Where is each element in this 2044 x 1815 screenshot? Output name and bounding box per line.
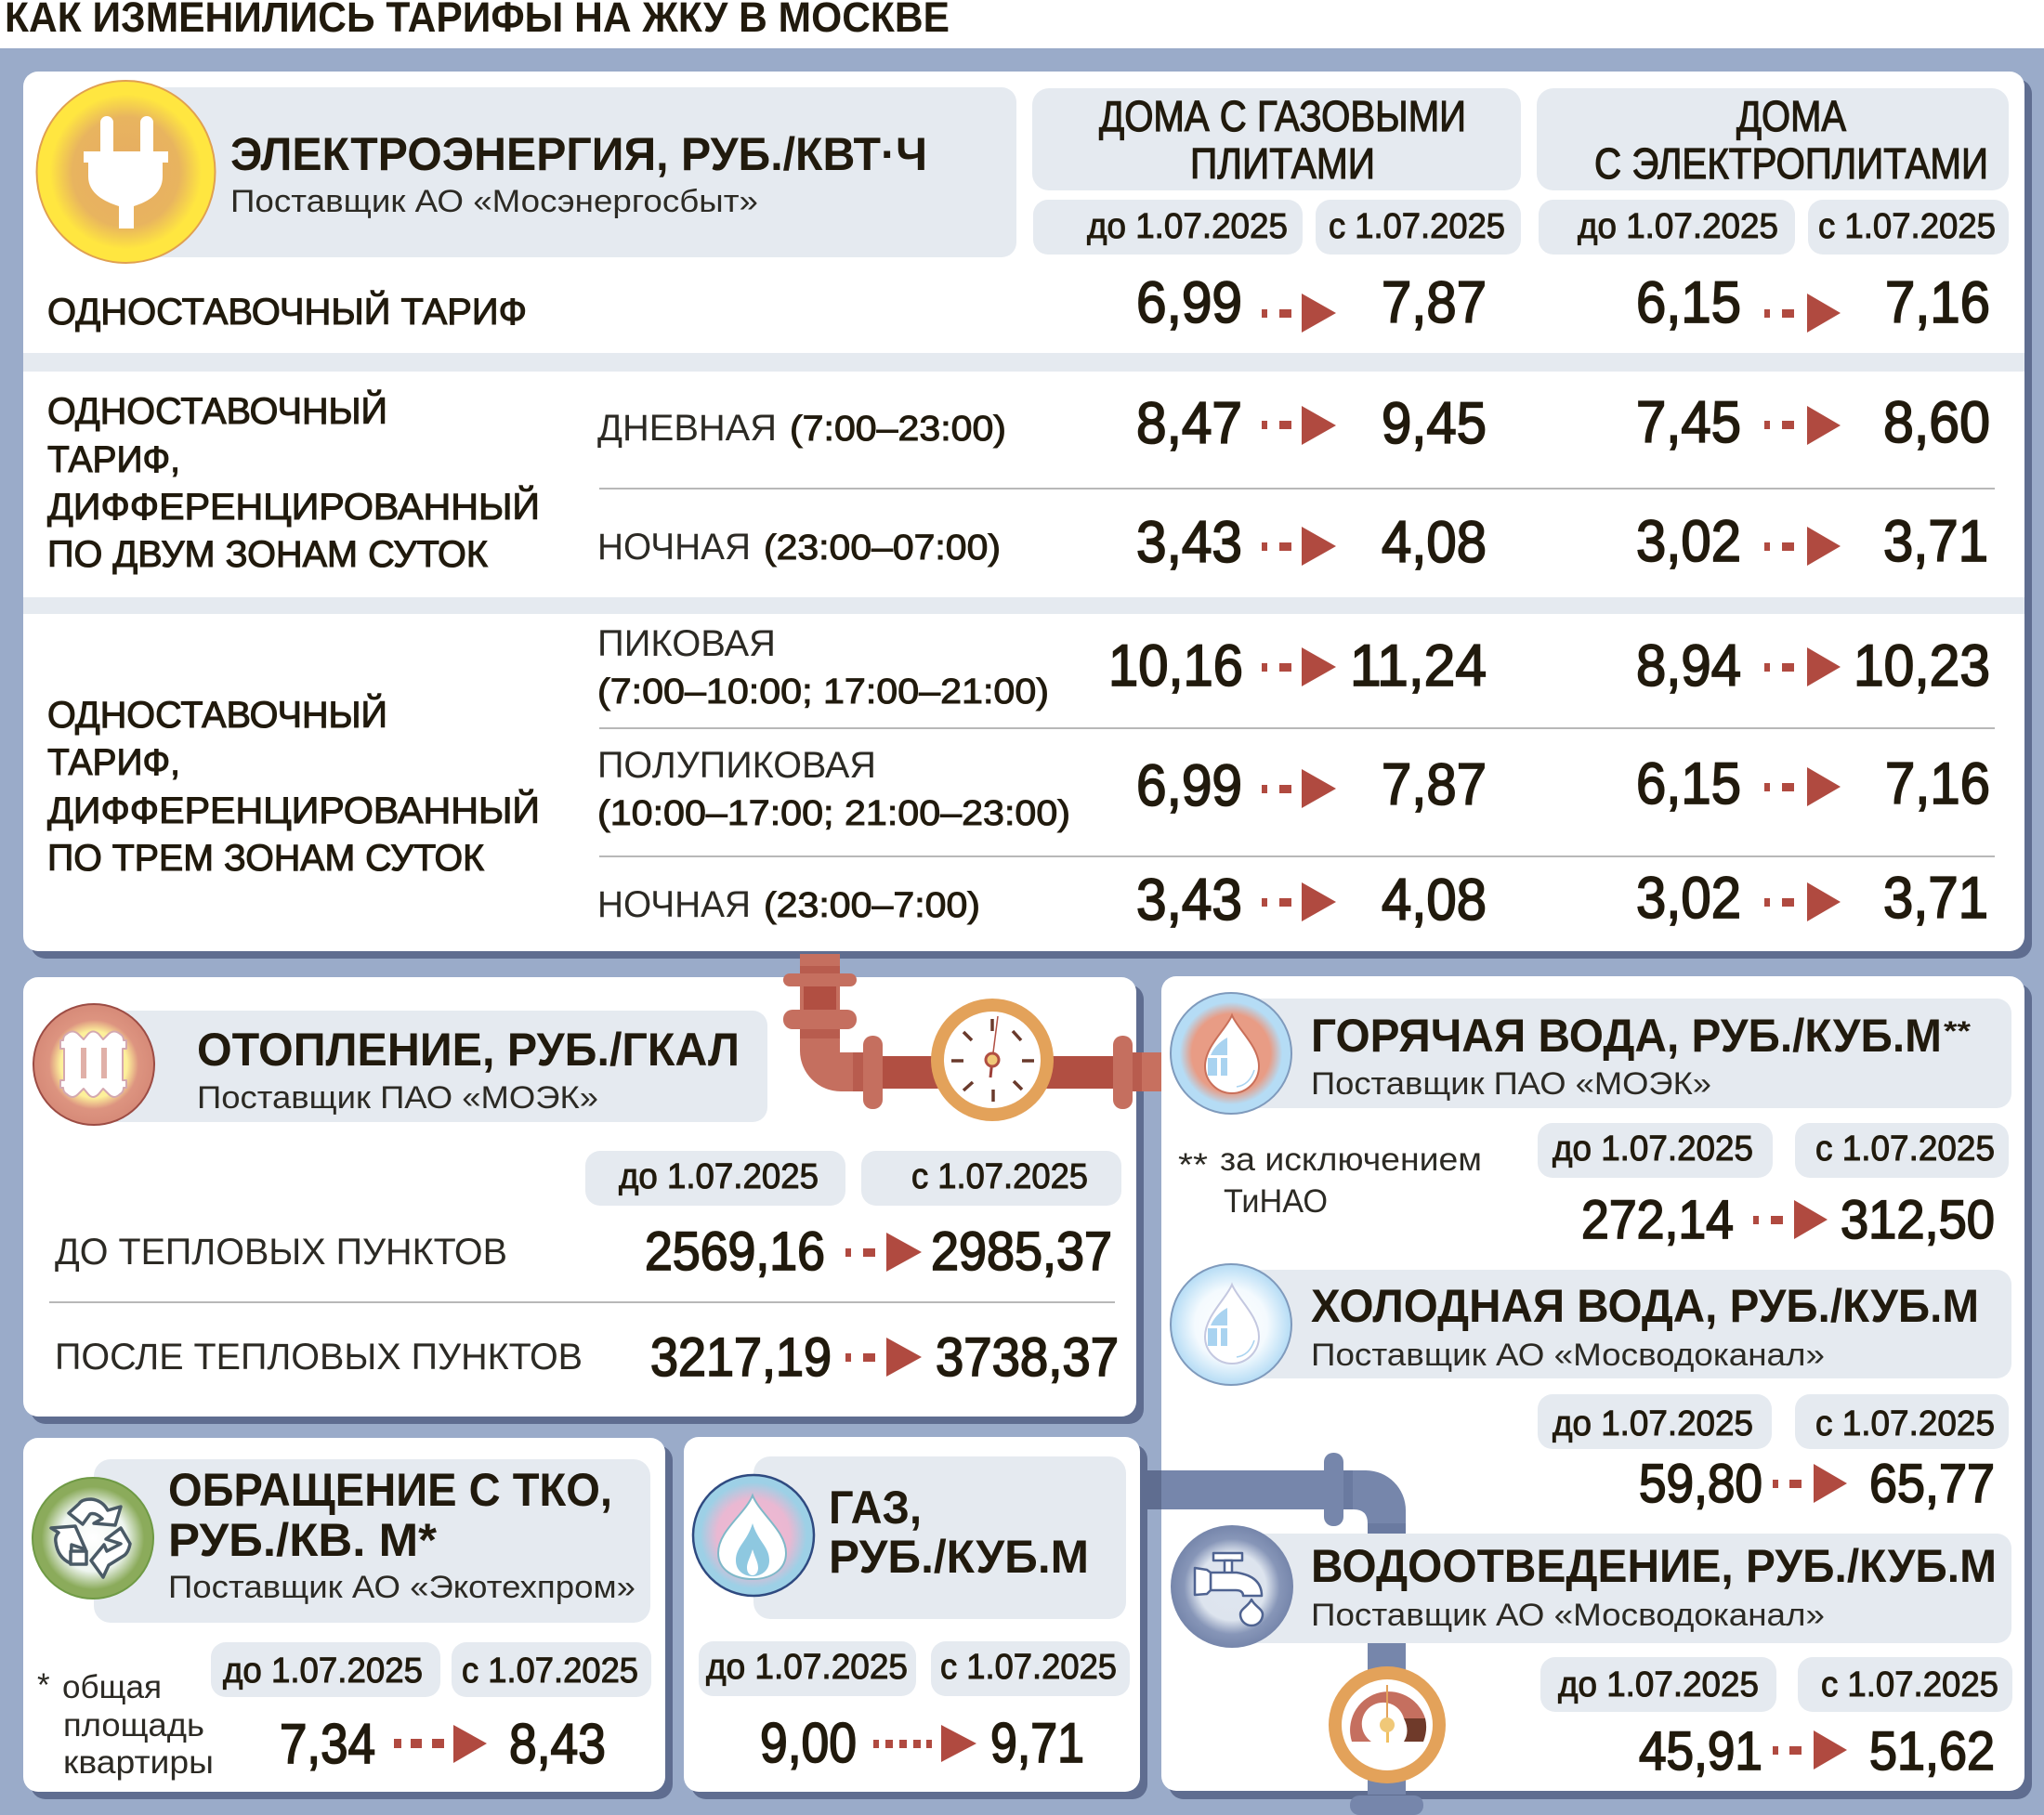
heating heading: Поставщик ПАО «МОЭК» [197,1080,598,1116]
column header: gas stoves: ПЛИТАМИ [1190,139,1375,188]
date pills [211,1642,651,1697]
electricity heading: Поставщик АО «Мосэнергосбыт» [230,184,758,219]
hot water heading: Поставщик ПАО «МОЭК» [1311,1066,1711,1102]
row: before heat points: 2569,16 [645,1221,825,1282]
row: night zone [597,509,1988,575]
red pipe with clock gauge [783,954,1161,1121]
values: 45,91 [1639,1721,1762,1782]
row: peak zone: 10,23 [1854,633,1990,699]
row: day zone: 9,45 [1382,391,1487,456]
row: before heat points: 2985,37 [931,1221,1112,1282]
row group: three-zone tariff label: ПО ТРЕМ ЗОНАМ СУТОК [47,838,485,879]
values: 9,00 [760,1712,857,1774]
row: after heat points: 3217,19 [650,1327,832,1388]
date pills [1538,1394,2009,1449]
waste heading: ОБРАЩЕНИЕ С ТКО, [168,1464,612,1516]
row: night zone: 4,08 [1382,510,1487,575]
panel: gas [684,1437,1147,1799]
row: night zone three-zone: 3,02 [1636,866,1741,931]
date pills [699,1641,1130,1696]
values: 9,71 [990,1712,1084,1774]
row: flat tariff: 7,87 [1382,270,1487,335]
footnote [37,1667,214,1781]
drainage heading: Поставщик АО «Мосводоканал» [1311,1598,1825,1633]
row: night zone three-zone: 3,71 [1883,866,1988,931]
panel: water [1141,976,2032,1815]
panel: waste [23,1438,673,1799]
icon: hot water drop [1171,993,1291,1114]
date pills: с 1.07.2025 [940,1648,1117,1687]
row: peak zone: 10,16 [1108,633,1243,699]
values [1581,1190,1995,1250]
icon: recycling [33,1478,153,1599]
row: day zone: ДНЕВНАЯ [597,408,777,449]
icon: plug [37,81,216,263]
footnote: * [37,1667,50,1704]
date pills [1033,200,2009,255]
values [1639,1721,1995,1782]
row: semi-peak zone [597,745,1990,833]
row: after heat points: ПОСЛЕ ТЕПЛОВЫХ ПУНКТОВ [55,1337,583,1378]
row: night zone three-zone: НОЧНАЯ [597,884,751,925]
icon: radiator [33,1004,154,1125]
row group: two-zone tariff label: ОДНОСТАВОЧНЫЙ [47,389,387,432]
date pills: с 1.07.2025 [1329,207,1505,246]
drainage heading [1231,1534,2011,1643]
row: before heat points [55,1221,1112,1282]
values: 272,14 [1581,1190,1734,1250]
row group: two-zone tariff label: ТАРИФ, [47,439,180,480]
values: 65,77 [1869,1454,1995,1514]
values: 51,62 [1869,1721,1995,1782]
waste heading [94,1459,650,1623]
date pills: до 1.07.2025 [1553,1129,1753,1169]
row: peak zone: 8,94 [1636,633,1741,699]
drainage heading: ВОДООТВЕДЕНИЕ, РУБ./КУБ.М [1311,1540,1997,1592]
row: day zone: 7,45 [1636,390,1741,455]
footnote: ** [1178,1147,1208,1183]
waste heading: Поставщик АО «Экотехпром» [168,1570,635,1605]
row: night zone three-zone [597,866,1988,933]
date pills: до 1.07.2025 [1558,1665,1759,1704]
waste heading: РУБ./КВ. М* [168,1514,438,1566]
row: semi-peak zone: (10:00–17:00; 21:00–23:00) [597,794,1070,833]
row: before heat points: ДО ТЕПЛОВЫХ ПУНКТОВ [55,1232,507,1273]
row group: two-zone tariff label [47,389,540,575]
row group: two-zone tariff label: ДИФФЕРЕНЦИРОВАННЫЙ [47,485,540,528]
panel: electricity [23,72,2032,959]
row group: three-zone tariff label [47,693,540,879]
column header: gas stoves [1032,88,1521,190]
column header: electric stoves: ДОМА [1736,92,1846,140]
date pills [585,1151,1121,1206]
date pills: с 1.07.2025 [1815,1129,1995,1169]
row group: three-zone tariff label: ОДНОСТАВОЧНЫЙ [47,693,387,736]
cold water heading [1231,1270,2011,1378]
row: peak zone [597,623,1990,712]
gas heading: ГАЗ, [829,1482,922,1534]
row: night zone: 3,43 [1136,510,1242,575]
footnote: общая [62,1669,162,1705]
footnote: площадь [63,1707,204,1743]
row: night zone three-zone: 3,43 [1136,868,1242,933]
date pills: до 1.07.2025 [1578,207,1778,246]
row: night zone: (23:00–07:00) [764,529,1001,568]
icon: faucet [1171,1525,1293,1648]
values [1639,1454,1995,1514]
row: flat tariff [47,270,1990,335]
cold water heading: Поставщик АО «Мосводоканал» [1311,1338,1825,1373]
row: night zone three-zone: (23:00–7:00) [764,886,980,925]
date pills: до 1.07.2025 [1087,207,1288,246]
footnote [1178,1142,1482,1220]
row: day zone: 8,47 [1136,391,1242,456]
row group: two-zone tariff label: ПО ДВУМ ЗОНАМ СУТОК [47,534,489,575]
date pills: с 1.07.2025 [462,1652,638,1691]
date pills: до 1.07.2025 [223,1652,423,1691]
icon: flame [693,1475,814,1596]
row: day zone: (7:00–23:00) [790,410,1006,449]
row group: three-zone tariff label: ТАРИФ, [47,742,180,783]
row: semi-peak zone: 6,99 [1136,753,1242,818]
column header: electric stoves: С ЭЛЕКТРОПЛИТАМИ [1594,139,1988,188]
hot water heading [1231,999,2011,1108]
icon: cold water drop [1171,1264,1291,1385]
row: semi-peak zone: 6,15 [1636,751,1741,816]
row: day zone: 8,60 [1883,390,1990,455]
footnote: ТиНАО [1224,1183,1328,1220]
date pills: с 1.07.2025 [1821,1665,1998,1704]
row: semi-peak zone: 7,87 [1382,752,1487,817]
heating heading [93,1011,767,1122]
row: flat tariff: 6,99 [1136,270,1242,335]
date pills: до 1.07.2025 [706,1648,908,1687]
row: night zone: НОЧНАЯ [597,527,751,568]
row: day zone [597,390,1990,456]
blue pipe with gauge [1141,1453,1446,1815]
row: flat tariff: 6,15 [1636,270,1741,335]
values: 8,43 [509,1713,606,1775]
hot water heading: ГОРЯЧАЯ ВОДА, РУБ./КУБ.М [1311,1010,1942,1062]
electricity heading: ЭЛЕКТРОЭНЕРГИЯ, РУБ./КВТ·Ч [230,128,927,180]
values: 7,34 [280,1713,375,1775]
row: peak zone: 11,24 [1350,633,1487,699]
date pills: до 1.07.2025 [619,1157,819,1196]
row: peak zone: ПИКОВАЯ [597,623,776,664]
date pills [1538,1123,2009,1178]
row: after heat points: 3738,37 [936,1327,1119,1388]
date pills [1540,1657,2012,1712]
hot water heading: ** [1944,1016,1971,1047]
values [280,1713,606,1775]
row: night zone: 3,71 [1883,509,1988,574]
values: 59,80 [1639,1454,1762,1514]
gas heading: РУБ./КУБ.М [829,1531,1089,1583]
date pills: до 1.07.2025 [1553,1404,1753,1443]
electricity heading [121,87,1016,257]
values: 312,50 [1841,1190,1995,1250]
row: night zone: 3,02 [1636,509,1741,574]
date pills: с 1.07.2025 [1815,1404,1995,1443]
row: semi-peak zone: 7,16 [1885,751,1990,816]
date pills: с 1.07.2025 [911,1157,1088,1196]
row: night zone three-zone: 4,08 [1382,868,1487,933]
row: flat tariff: 7,16 [1885,270,1990,335]
row: peak zone: (7:00–10:00; 17:00–21:00) [597,672,1049,712]
panel: heating [23,977,1144,1424]
row: semi-peak zone: ПОЛУПИКОВАЯ [597,745,876,786]
heating heading: ОТОПЛЕНИЕ, РУБ./ГКАЛ [197,1024,740,1076]
values [760,1712,1084,1774]
row group: three-zone tariff label: ДИФФЕРЕНЦИРОВАННЫЙ [47,789,540,831]
row: after heat points [55,1327,1119,1388]
column header: gas stoves: ДОМА С ГАЗОВЫМИ [1099,92,1466,140]
row: flat tariff: ОДНОСТАВОЧНЫЙ ТАРИФ [47,290,527,333]
column header: electric stoves [1537,88,2009,190]
footnote: квартиры [63,1744,214,1781]
cold water heading: ХОЛОДНАЯ ВОДА, РУБ./КУБ.М [1311,1280,1979,1332]
date pills: с 1.07.2025 [1818,207,1996,246]
gas heading [753,1456,1126,1619]
footnote: за исключением [1220,1142,1482,1178]
